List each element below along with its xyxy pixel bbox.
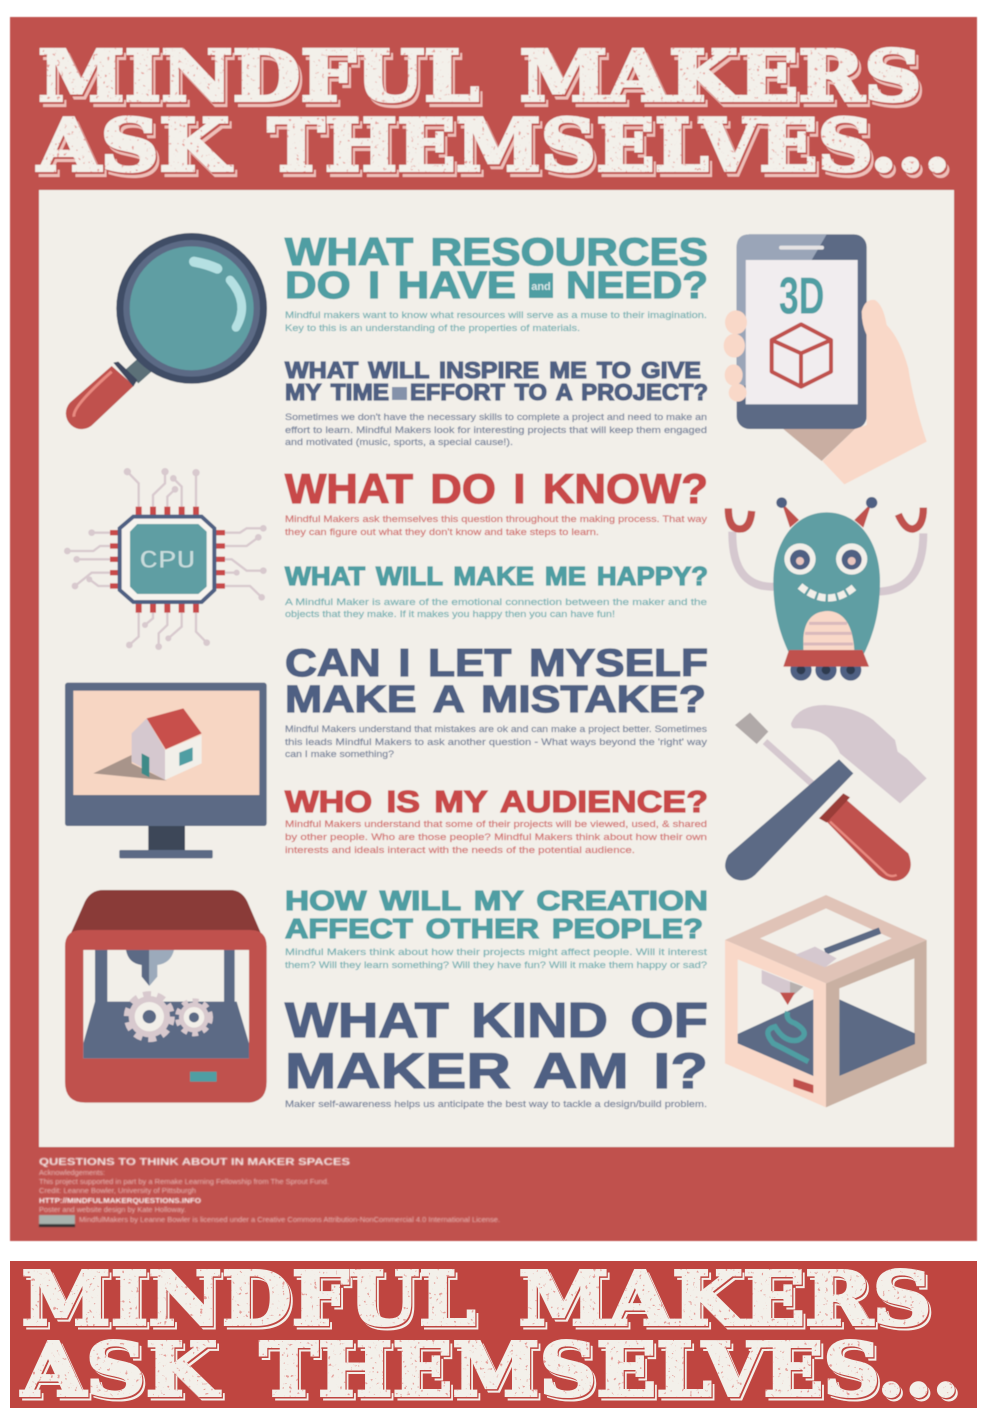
bottom title banner: THEMSELVES... — [260, 1328, 960, 1414]
footer credits: Credit: Leanne Bowler, University of Pittsburgh — [39, 1186, 196, 1195]
title: MAKERS — [520, 34, 922, 118]
question: creation: HOW WILL MY CREATION — [285, 885, 708, 916]
question: happy: WHAT WILL MAKE ME HAPPY? — [285, 561, 708, 591]
bottom title banner: MINDFUL — [22, 1256, 476, 1342]
title: THEMSELVES... — [271, 108, 954, 192]
question: creation — [285, 885, 708, 971]
question: mistake: CAN I LET MYSELF — [285, 642, 708, 685]
content panel — [39, 190, 954, 1147]
question: inspire — [285, 357, 708, 448]
question: happy: A Mindful Maker is aware of the emotional connection between the maker and the — [285, 597, 707, 608]
bottom title banner: MAKERS — [518, 1256, 932, 1342]
title: MAKERS — [523, 40, 925, 122]
question: inspire: MY TIME — [285, 379, 389, 405]
icon: CPU chip — [64, 468, 267, 650]
question: inspire: WHAT WILL INSPIRE ME TO GIVE — [285, 357, 701, 383]
bottom title banner: MINDFUL — [24, 1260, 479, 1346]
title: MINDFUL — [42, 40, 482, 122]
question: kind of maker: Maker self-awareness helps us anticipate the best way to tackle a design/build problem. — [285, 1099, 707, 1110]
bottom title banner: ASK — [20, 1328, 221, 1414]
title — [36, 34, 954, 192]
icon: robot — [728, 497, 923, 681]
footer credits: MindfulMakers by Leanne Bowler is licensed under a Creative Commons Attribution-NonCommercial 4.0 International License. — [79, 1215, 500, 1224]
question: resources: NEED? — [566, 265, 708, 307]
question: creation: Mindful Makers think about how their projects might affect people. Will it interest — [285, 947, 707, 958]
icon: monitor with house — [65, 683, 267, 858]
question: inspire: Sometimes we don't have the necessary skills to complete a project and need to make an — [285, 412, 707, 423]
question: inspire: effort to learn. Mindful Makers look for interesting projects that will keep them engaged — [285, 425, 707, 436]
question: audience: by other people. Who are those people? Mindful Makers think about how their own — [285, 832, 707, 843]
question: resources: Key to this is an understanding of the properties of materials. — [285, 323, 580, 334]
question: inspire: and motivated (music, sports, a special cause!). — [285, 437, 513, 448]
bottom title banner — [10, 1256, 977, 1417]
icon: isometric 3D printer — [725, 895, 927, 1107]
footer credits: QUESTIONS TO THINK ABOUT IN MAKER SPACES — [39, 1157, 350, 1168]
question: creation: AFFECT OTHER PEOPLE? — [285, 913, 703, 944]
footer credits: This project supported in part by a Remake Learning Fellowship from The Sprout Fund. — [39, 1177, 329, 1186]
question: audience: interests and ideals interact with the needs of the potential audience. — [285, 845, 635, 856]
bottom title banner: MINDFUL — [23, 1258, 477, 1344]
bottom title banner: THEMSELVES... — [261, 1329, 961, 1415]
icon: hand holding phone — [724, 234, 927, 484]
icon: red desktop 3D printer with gears — [65, 890, 267, 1103]
icon: hand holding phone: 3D — [779, 266, 824, 324]
question: resources: WHAT RESOURCES — [285, 231, 708, 274]
question: kind of maker: WHAT KIND OF — [285, 994, 708, 1048]
icon: hammer and screwdriver — [725, 705, 927, 881]
question: mistake: can I make something? — [285, 749, 394, 760]
question: mistake: Mindful Makers understand that mistakes are ok and can make a project better. Sometimes — [285, 724, 707, 735]
title: THEMSELVES... — [268, 102, 950, 188]
title: MINDFUL — [38, 34, 479, 118]
question: mistake — [285, 642, 708, 760]
question: know: they can figure out what they don't know and take steps to learn. — [285, 527, 599, 538]
bottom title banner: THEMSELVES... — [262, 1331, 962, 1417]
question: resources: and — [531, 281, 551, 293]
footer credits: Poster and website design by Kate Holloway. — [39, 1205, 186, 1214]
bottom title banner: ASK — [23, 1331, 224, 1417]
question: mistake: this leads Mindful Makers to ask another question - What ways beyond the 'right' way — [285, 737, 707, 748]
question: know: Mindful Makers ask themselves this question throughout the making process. That way — [285, 514, 707, 525]
question: happy: objects that they make. If it makes you happy then you can have fun! — [285, 609, 615, 620]
question: audience: Mindful Makers understand that some of their projects will be viewed, used, & shared — [285, 819, 707, 830]
icon: CPU chip: CPU — [139, 546, 195, 575]
title: MINDFUL — [40, 36, 480, 120]
question: audience: WHO IS MY AUDIENCE? — [285, 784, 708, 819]
bottom title banner: ASK — [22, 1329, 222, 1415]
icon: magnifying glass — [66, 233, 267, 429]
footer credits: HTTP://MINDFULMAKERQUESTIONS.INFO — [39, 1196, 201, 1205]
question: creation: them? Will they learn something? Will they have fun? Will it make them happy or sad? — [285, 960, 707, 971]
question: audience — [285, 784, 708, 856]
bottom title banner: MAKERS — [520, 1258, 933, 1344]
title: ASK — [38, 104, 234, 190]
title: ASK — [40, 108, 236, 192]
title: THEMSELVES... — [269, 104, 952, 190]
question: happy — [285, 561, 708, 620]
question: know — [285, 465, 708, 538]
question: resources: Mindful makers want to know what resources will serve as a muse to their imagination. — [285, 310, 707, 321]
footer credits: Acknowledgements: — [39, 1168, 105, 1177]
question: kind of maker: MAKER AM I? — [285, 1043, 708, 1099]
question: resources — [285, 231, 708, 334]
bottom title banner: MAKERS — [522, 1260, 934, 1346]
question: kind of maker — [285, 994, 708, 1110]
question: inspire: EFFORT TO A PROJECT? — [410, 379, 708, 405]
title: ASK — [36, 102, 232, 188]
question: know: WHAT DO I KNOW? — [285, 465, 708, 512]
question: resources: DO I HAVE — [285, 265, 516, 307]
footer credits — [39, 1157, 500, 1227]
title: MAKERS — [521, 36, 923, 120]
question: mistake: MAKE A MISTAKE? — [285, 679, 706, 721]
